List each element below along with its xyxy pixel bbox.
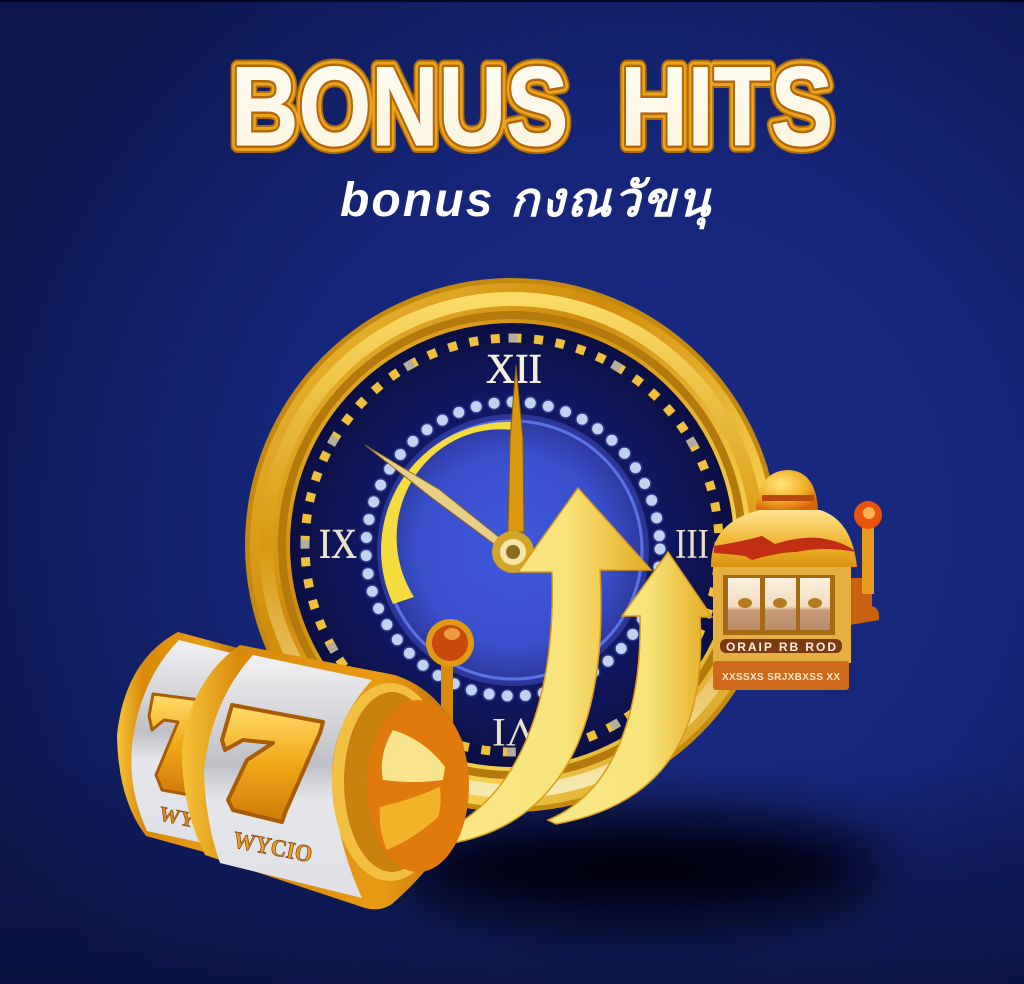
front reel seven xyxy=(222,705,323,822)
back reel xyxy=(117,632,245,852)
slot windows xyxy=(723,575,835,635)
yellow progress arc xyxy=(381,422,513,604)
bead ring xyxy=(366,402,660,696)
back reel silver panel xyxy=(131,640,235,843)
slot cabinet top xyxy=(711,510,857,567)
outer dot track xyxy=(305,338,719,752)
numeral XI: XII xyxy=(486,347,542,393)
front reel label: WYCIO xyxy=(231,827,314,868)
clock gold ring xyxy=(245,278,779,812)
back reel label: WYO xyxy=(157,801,213,836)
front reel gold cap xyxy=(332,683,469,881)
slot lever xyxy=(850,501,882,625)
ground shadow xyxy=(400,818,880,918)
slot red band xyxy=(714,536,856,560)
front reel xyxy=(182,645,469,909)
inner ring line xyxy=(384,421,642,679)
numeral IX: IX xyxy=(319,522,357,568)
title: BONUS HITS: BONUS HITS xyxy=(231,44,833,169)
clock face xyxy=(290,323,734,767)
slot dome xyxy=(756,470,818,510)
front reel silver panel xyxy=(204,655,372,898)
title: BONUS HITS: BONUS HITS xyxy=(231,44,833,169)
clock xyxy=(245,278,779,812)
slot base xyxy=(713,661,849,690)
back reel seven xyxy=(149,694,200,795)
front arrow xyxy=(436,488,651,844)
mini slot machine xyxy=(711,470,882,690)
slot body xyxy=(713,567,851,663)
slot base: XXSSXS SRJXBXSS XX xyxy=(722,672,840,683)
numeral VI: VI xyxy=(492,710,536,755)
title: BONUS HITS: BONUS HITS xyxy=(231,44,833,169)
slot label: ORAIP RB ROD xyxy=(726,640,836,654)
blue centre disc xyxy=(377,414,649,686)
back arrow xyxy=(548,552,712,824)
clock hands xyxy=(365,365,534,573)
title: BONUS HITS: BONUS HITS xyxy=(231,44,833,169)
subtitle: bonus กงณวัขนุ xyxy=(340,174,712,230)
reel lever xyxy=(426,619,474,730)
numeral III: III xyxy=(675,522,709,568)
